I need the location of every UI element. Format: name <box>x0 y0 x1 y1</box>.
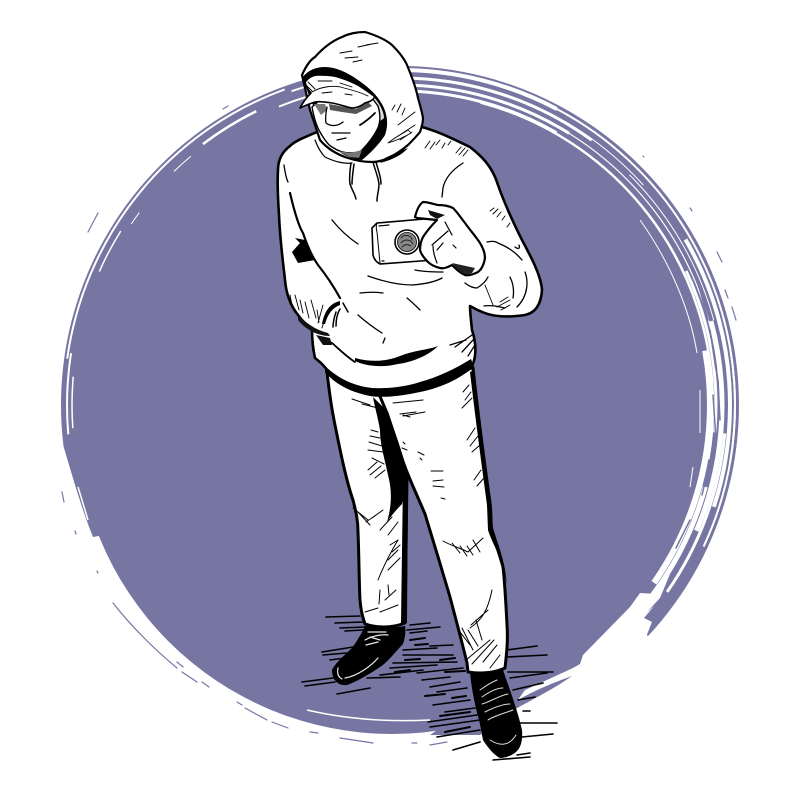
hood folds <box>340 43 415 140</box>
lower right white cut <box>480 574 690 790</box>
nose and mouth <box>326 107 350 140</box>
right leg thick outline <box>470 370 507 585</box>
pocket crescent shadow <box>322 301 340 324</box>
hoodie lines and folds <box>284 163 527 362</box>
streak below the cut <box>508 676 572 712</box>
hem shading <box>355 346 438 366</box>
crotch shadow <box>373 397 407 522</box>
cap <box>300 75 375 108</box>
hand holding camera <box>415 202 485 275</box>
hood interior <box>302 67 387 160</box>
under-sleeve shadow <box>298 315 332 345</box>
right leg <box>373 368 507 673</box>
brim shadow <box>314 104 327 115</box>
hoodie hatching <box>290 140 510 328</box>
trouser shading <box>352 385 500 668</box>
underarm shadow <box>292 238 315 263</box>
waistband shadow <box>325 359 474 397</box>
left leg inner dark seam <box>401 480 408 623</box>
figure <box>278 32 557 760</box>
camera <box>372 218 436 264</box>
white brush streaks, right <box>65 70 735 740</box>
shoulder hood shadow <box>380 148 408 163</box>
white brush streaks, left <box>64 69 736 741</box>
hood inner highlight <box>370 97 384 121</box>
hood <box>302 32 423 163</box>
face <box>312 98 380 158</box>
small purple flecks inside the white gap <box>676 290 720 548</box>
drawstrings <box>315 140 381 201</box>
left leg <box>327 372 407 627</box>
neck shadow <box>338 150 362 158</box>
left shoe <box>332 623 405 685</box>
stray purple brush flecks <box>62 106 736 745</box>
brush circle background <box>61 66 739 790</box>
hoodie body <box>278 110 542 392</box>
ground hatching <box>302 616 557 760</box>
right shoe <box>470 670 522 758</box>
